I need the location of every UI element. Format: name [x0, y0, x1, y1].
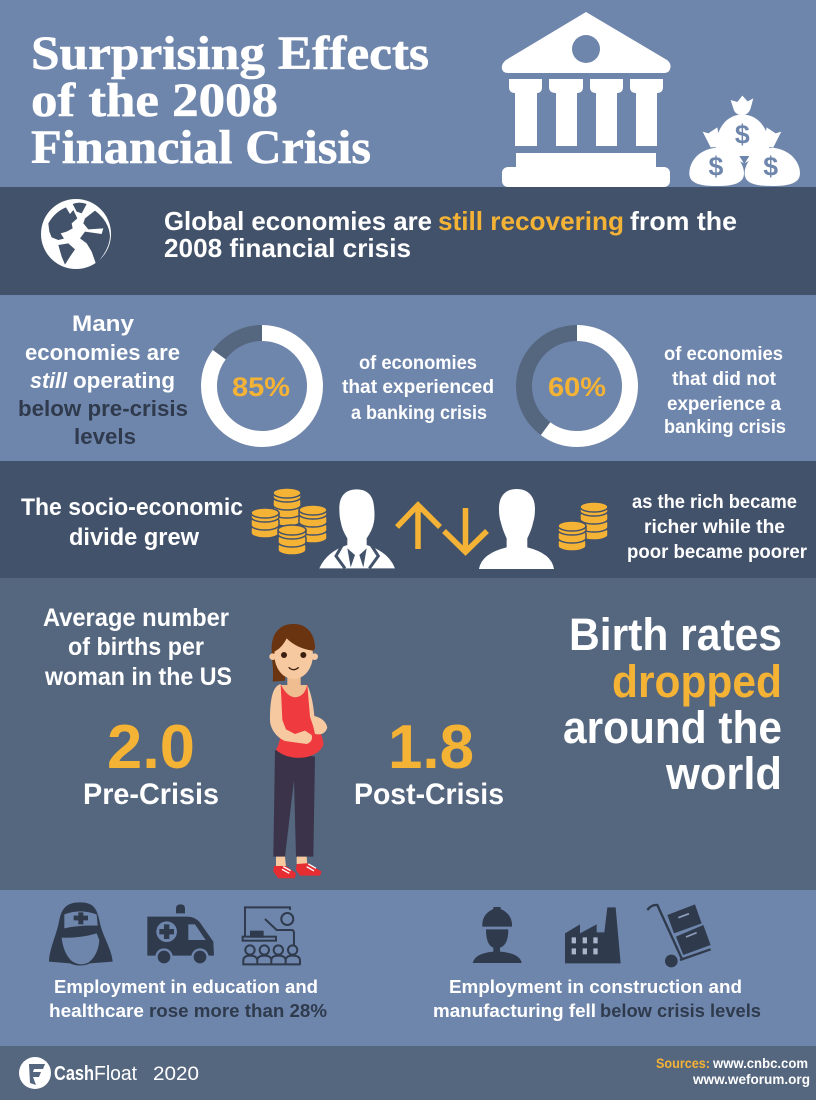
text: banking crisis economies: that experienced [342, 377, 494, 398]
title: Surprising Effects [31, 27, 429, 80]
intro text: 2008 financial crisis [164, 233, 411, 263]
text: education and healthcare: healthcare [49, 1000, 144, 1021]
icon: rich person [319, 489, 395, 568]
intro text: still recovering [438, 206, 624, 236]
text: average births: woman in the US [44, 663, 232, 691]
text: many economies: levels [74, 424, 136, 449]
icon: money bags: $ [735, 119, 750, 149]
illustration: pregnant woman [269, 624, 327, 878]
text: many economies: operating [73, 368, 175, 393]
heading: birth rates dropped: around the [563, 702, 782, 753]
icon: ambulance [147, 904, 214, 966]
panel: employment [0, 890, 816, 1046]
panel: birth rates [0, 578, 816, 890]
icon: bank building [502, 12, 671, 187]
stat: pre-crisis: Pre-Crisis [83, 778, 219, 811]
heading: birth rates dropped: world [665, 748, 782, 799]
heading: birth rates dropped: Birth rates [569, 609, 782, 660]
text: many economies: below pre-crisis [18, 396, 188, 421]
icon: teacher and students [242, 907, 301, 964]
stat: post-crisis: Post-Crisis [354, 778, 504, 811]
heading: divide: The socio-economic [21, 494, 243, 521]
text: average births: Average number [43, 604, 229, 632]
icon: globe [41, 199, 111, 269]
icon: nurse [49, 902, 113, 965]
panel: socio-economic divide [0, 461, 816, 578]
text: average births: of births per [68, 633, 204, 661]
arrow: down [444, 508, 487, 552]
sources: Sources: [656, 1056, 710, 1071]
text: rich and poor: richer while the [644, 517, 785, 538]
icon: large coin stacks [251, 488, 327, 555]
text: no banking crisis economies: banking crisis [664, 417, 786, 438]
text: rich and poor: poor became poorer [627, 542, 808, 563]
panel: pre-crisis levels [0, 295, 816, 461]
text: no banking crisis economies: of economies [664, 344, 783, 365]
chart: 60% donut [524, 333, 630, 439]
year: 2020 [153, 1064, 199, 1085]
text: banking crisis economies: a banking crisis [351, 403, 487, 424]
chart: 60% donut: 60% [548, 372, 606, 402]
chart: 85% donut: 85% [232, 372, 290, 402]
text: many economies: economies are [25, 340, 180, 365]
icon: hand truck [647, 904, 711, 967]
stat: post-crisis: 1.8 [388, 713, 474, 782]
text: education and healthcare: Employment in education and [54, 976, 318, 997]
title: of the 2008 [31, 74, 278, 127]
heading: divide: divide grew [69, 524, 199, 551]
panel: header [0, 0, 816, 187]
sources: www.cnbc.com [712, 1056, 808, 1071]
text: rich and poor: as the rich became [632, 492, 797, 513]
panel: global economies [0, 187, 816, 295]
text: construction and manufacturing: manufacturing fell [433, 1000, 596, 1021]
sources: www.weforum.org [692, 1072, 810, 1087]
icon: money bags [689, 96, 800, 186]
icon: construction worker [473, 907, 522, 963]
arrow: up [397, 505, 440, 549]
icon: small coin stacks [558, 502, 608, 551]
text: banking crisis economies: of economies [359, 353, 477, 374]
icon: money bags: $ [709, 152, 724, 182]
icon: money bags: $ [763, 152, 778, 182]
logo: CashFloat: Float [94, 1063, 137, 1085]
icon: factory [565, 907, 621, 963]
text: construction and manufacturing: below crisis levels [600, 1000, 761, 1021]
intro text: from the [630, 206, 737, 236]
panel: footer [0, 1046, 816, 1100]
stat: pre-crisis: 2.0 [107, 713, 195, 782]
logo: CashFloat [19, 1057, 137, 1089]
text: many economies: Many [72, 311, 135, 336]
logo: CashFloat: Cash [54, 1063, 94, 1085]
icon: poor person [479, 489, 554, 569]
text: many economies: still [30, 368, 68, 393]
chart: 85% donut [209, 333, 315, 439]
text: no banking crisis economies: experience a [667, 394, 781, 415]
text: construction and manufacturing: Employment in construction and [449, 976, 742, 997]
intro text: Global economies are [164, 206, 432, 236]
title: Financial Crisis [31, 121, 371, 174]
text: education and healthcare: rose more than 28% [149, 1000, 327, 1021]
heading: birth rates dropped: dropped [612, 656, 782, 707]
text: no banking crisis economies: that did not [672, 369, 777, 390]
